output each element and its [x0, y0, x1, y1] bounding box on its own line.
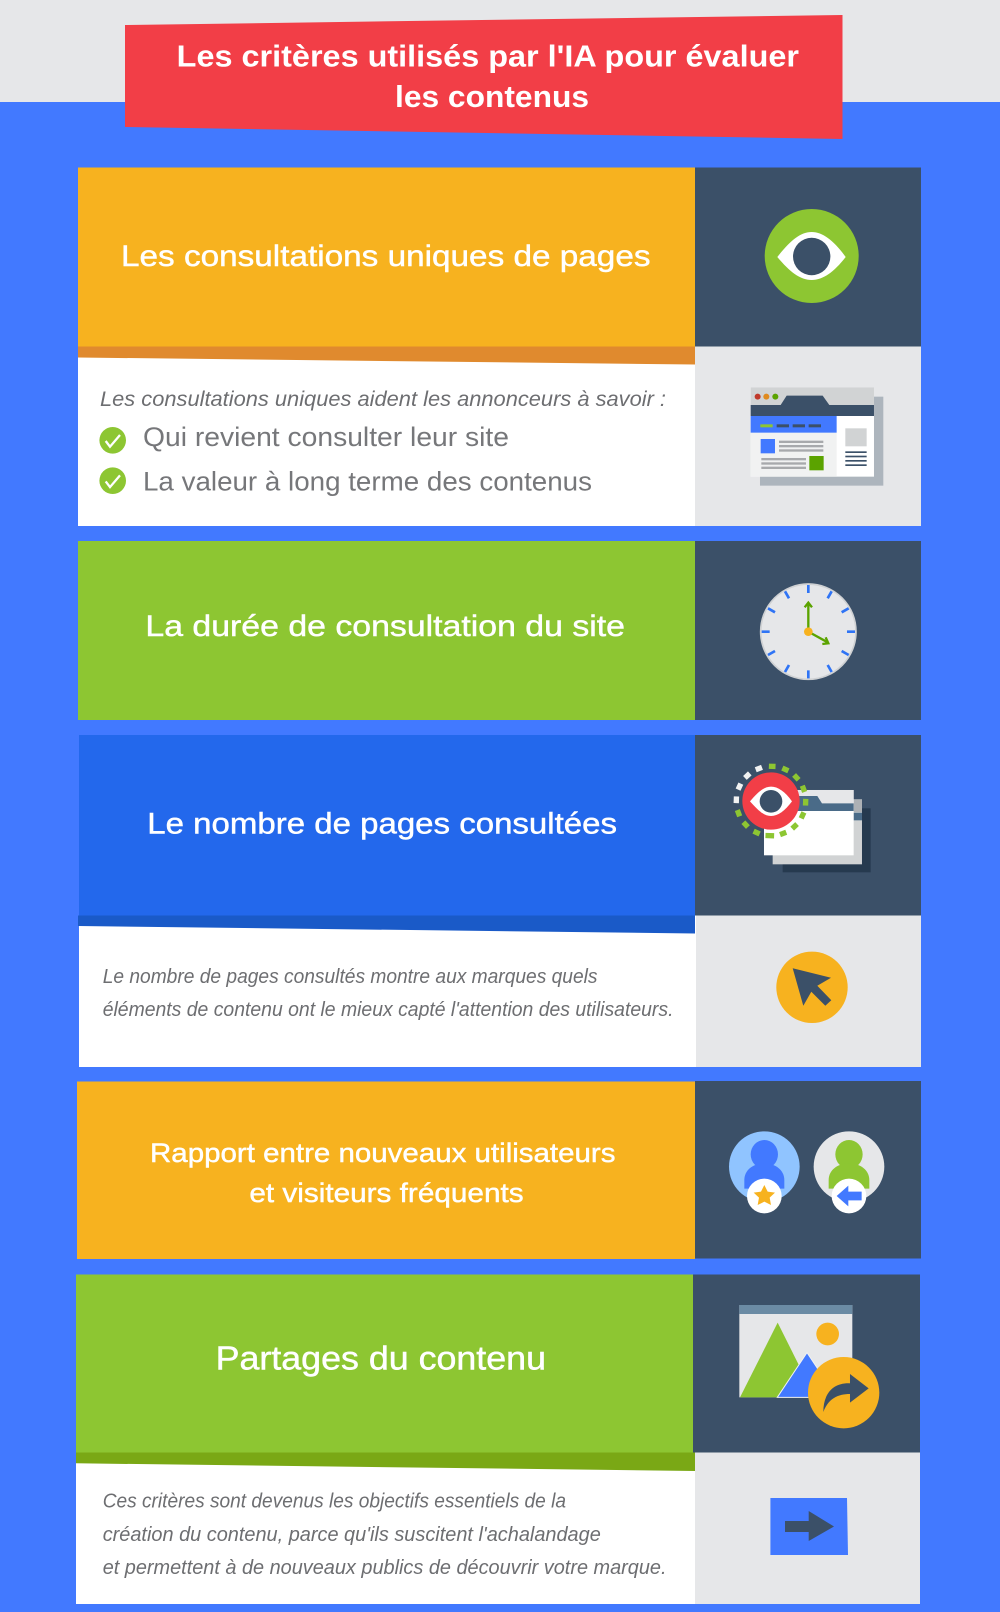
description block: et permettent à de nouveaux publics de découvrir votre marque. [103, 1556, 666, 1579]
icon tile: cursor [696, 916, 921, 1067]
heading band: nombre de pages [79, 735, 695, 916]
description block: Les consultations uniques aident les annonceurs à savoir : [100, 387, 666, 411]
icon tile: arrow box [695, 1452, 920, 1604]
panel: durée de consultation [78, 541, 921, 720]
icon tile: eye over pages [695, 735, 921, 916]
description block [78, 916, 696, 1067]
panel: partages du contenu [76, 1274, 920, 1604]
panel: consultations uniques [78, 168, 921, 526]
icon tile: two users [695, 1081, 921, 1258]
heading band: consultations uniques: Les consultations uniques de pages [121, 240, 650, 273]
heading band: durée [78, 541, 695, 720]
description block [76, 1452, 695, 1604]
list item: valeur: La valeur à long terme des contenus [143, 466, 592, 496]
heading band: durée: La durée de consultation du site [145, 610, 625, 643]
description block: Ces critères sont devenus les objectifs essentiels de la [103, 1490, 566, 1512]
list item: qui revient: Qui revient consulter leur site [143, 422, 509, 452]
description block: éléments de contenu ont le mieux capté l'attention des utilisateurs. [103, 998, 673, 1021]
description block: création du contenu, parce qu'ils suscitent l'achalandage [103, 1523, 601, 1546]
heading band: partages: Partages du contenu [216, 1340, 546, 1376]
description block: Le nombre de pages consultés montre aux marques quels [103, 965, 597, 988]
heading band: rapport [77, 1082, 695, 1259]
description block [78, 346, 695, 526]
panel: nombre de pages [78, 735, 921, 1067]
heading band: consultations uniques [78, 168, 695, 346]
heading band: nombre de pages: Le nombre de pages consultées [147, 808, 617, 840]
title banner: Les critères utilisés par l'IA pour évaluer [177, 38, 799, 74]
icon tile: eye [695, 168, 921, 346]
icon tile: clock [695, 541, 921, 720]
icon tile: web page [695, 346, 921, 526]
heading band: rapport: et visiteurs fréquents [249, 1178, 524, 1208]
icon tile: image share [693, 1274, 920, 1452]
title banner: les contenus [395, 79, 589, 114]
panel: nouveaux utilisateurs et visiteurs fréquents [77, 1081, 921, 1259]
title banner [125, 15, 842, 139]
heading band: rapport: Rapport entre nouveaux utilisateurs [150, 1138, 616, 1168]
heading band: partages [76, 1274, 693, 1452]
